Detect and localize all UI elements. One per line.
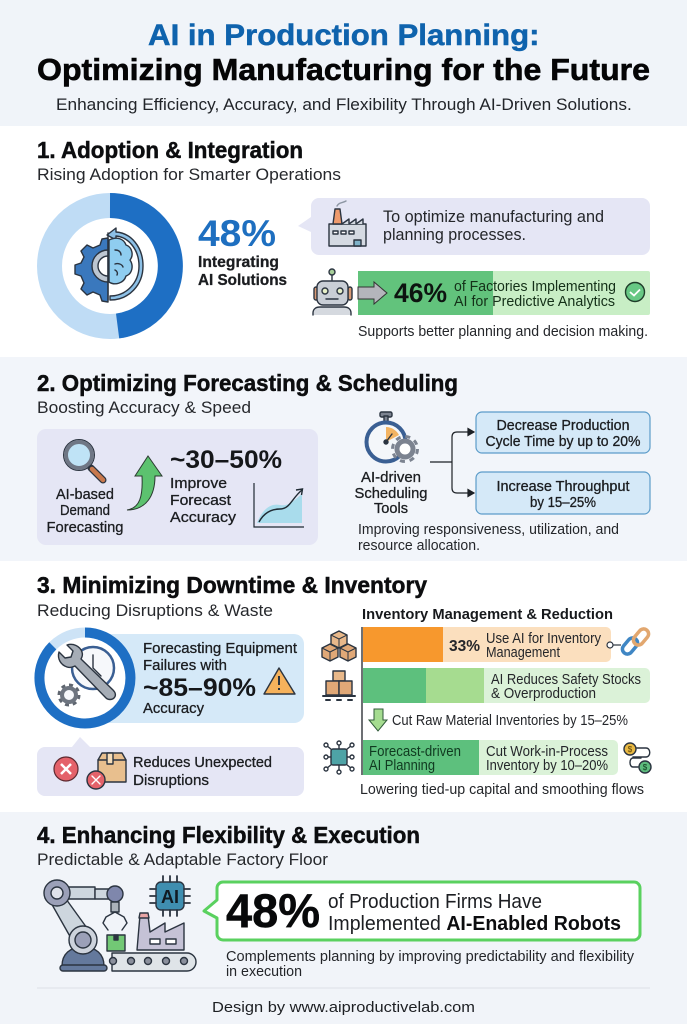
panel: reduces disruptions bbox=[37, 737, 304, 796]
icon: arrow bbox=[358, 282, 387, 304]
note: resource allocation. bbox=[358, 537, 480, 554]
icon: wrench, clock and gear bbox=[58, 644, 115, 705]
footer credit: Design by www.aiproductivelab.com bbox=[212, 999, 475, 1016]
stat 48%: 48% bbox=[198, 213, 276, 254]
panel: equipment failures: Accuracy bbox=[143, 700, 204, 717]
box: cycle time: Decrease Production bbox=[496, 417, 630, 434]
icon: coins: $ bbox=[643, 763, 648, 772]
stat bar: 46%: 46% bbox=[394, 278, 447, 308]
heading: 1. Adoption & Integration bbox=[37, 137, 303, 163]
bar: 33% bbox=[363, 627, 611, 662]
bar: 33%: 33% bbox=[449, 638, 480, 655]
panel: equipment failures: Failures with bbox=[143, 657, 227, 674]
panel: equipment failures bbox=[35, 628, 304, 728]
title line 2: Optimizing Manufacturing for the Future bbox=[37, 52, 650, 87]
callout: optimize: planning processes. bbox=[383, 226, 526, 244]
box: throughput bbox=[476, 472, 650, 514]
callout: 48% robots: 48% bbox=[226, 884, 320, 937]
note bbox=[226, 948, 634, 980]
heading: 3. Minimizing Downtime & Inventory bbox=[37, 572, 427, 598]
stat bar: 46%: AI for Predictive Analytics bbox=[454, 293, 615, 310]
icon: check bbox=[626, 282, 644, 302]
callout: optimize bbox=[298, 198, 650, 255]
label: scheduling tools bbox=[354, 469, 428, 517]
panel: demand forecasting: Forecast bbox=[170, 492, 232, 509]
note: Supports better planning and decision making. bbox=[358, 323, 648, 340]
bar: 33%: Management bbox=[486, 644, 561, 661]
bar: forecast-driven: Inventory by 10–20% bbox=[486, 757, 608, 774]
note: Improving responsiveness, utilization, and bbox=[358, 521, 619, 538]
section 1: adoption and integration: AI Solutions bbox=[198, 272, 287, 289]
icon: robot arm with factory and conveyor: AI bbox=[161, 887, 179, 907]
panel: demand forecasting bbox=[37, 429, 318, 545]
panel: demand forecasting: Forecasting bbox=[46, 519, 124, 536]
section 3: downtime and inventory bbox=[35, 572, 651, 798]
bar: safety stocks: & Overproduction bbox=[491, 685, 596, 702]
panel: demand forecasting: Improve bbox=[170, 475, 227, 492]
bar: forecast-driven: Cut Work-in-Process bbox=[486, 743, 608, 760]
icon: stopwatch and gear bbox=[366, 412, 418, 462]
callout: optimize: To optimize manufacturing and bbox=[383, 208, 604, 226]
bar: 33%: Use AI for Inventory bbox=[486, 630, 601, 647]
icon: pallet bbox=[323, 671, 355, 700]
icon: warning bbox=[264, 668, 295, 694]
callout: 48% robots: Implemented AI-Enabled Robots bbox=[328, 913, 621, 935]
icon: AI chip network bbox=[324, 741, 354, 774]
section 2: forecasting and scheduling bbox=[37, 370, 650, 554]
icon: coins: $ bbox=[628, 745, 633, 754]
bar: safety stocks bbox=[363, 668, 650, 703]
panel: demand forecasting: AI-based bbox=[56, 486, 114, 503]
label: scheduling tools: Scheduling bbox=[354, 485, 428, 502]
bar: forecast-driven: Forecast-driven bbox=[369, 743, 461, 760]
icon: factory bbox=[329, 201, 366, 246]
label: scheduling tools: AI-driven bbox=[361, 469, 421, 486]
donut gauge bbox=[35, 628, 135, 728]
panel: equipment failures: ~85–90% bbox=[143, 674, 256, 702]
icon: up arrow bbox=[127, 456, 162, 510]
callout: 48% robots: of Production Firms Have bbox=[328, 891, 542, 913]
section 1: adoption and integration bbox=[37, 137, 650, 340]
stat bar: 46%: of Factories Implementing bbox=[454, 278, 616, 295]
panel: reduces disruptions: Disruptions bbox=[133, 772, 209, 789]
axis bbox=[361, 627, 363, 775]
panel: equipment failures: Forecasting Equipment bbox=[143, 640, 298, 657]
header bbox=[37, 18, 650, 114]
bar: forecast-driven bbox=[363, 740, 618, 775]
icon: boxes bbox=[322, 631, 356, 661]
heading: 2. Optimizing Forecasting & Scheduling bbox=[37, 370, 458, 396]
box: cycle time bbox=[476, 412, 650, 453]
chart title: Inventory Management & Reduction bbox=[362, 607, 613, 623]
icon: coins bbox=[624, 743, 651, 773]
box: throughput: Increase Throughput bbox=[496, 478, 630, 495]
callout: 48% robots bbox=[204, 882, 640, 940]
subheading: Rising Adoption for Smarter Operations bbox=[37, 165, 341, 184]
bar: forecast-driven: AI Planning bbox=[369, 757, 435, 774]
chart: rising line bbox=[254, 483, 304, 527]
box: throughput: by 15–25% bbox=[530, 494, 596, 511]
panel: reduces disruptions: Reduces Unexpected bbox=[133, 754, 272, 771]
note: Lowering tied-up capital and smoothing flows bbox=[360, 781, 644, 798]
label: raw material: Cut Raw Material Inventories by 15–25% bbox=[392, 712, 628, 729]
subheading: Predictable & Adaptable Factory Floor bbox=[37, 850, 328, 869]
icon: gear and brain bbox=[75, 228, 143, 302]
icon: box with cross bbox=[87, 753, 126, 789]
stat bar: 46% bbox=[358, 271, 650, 315]
icon: robot bbox=[313, 269, 352, 315]
inventory chart bbox=[360, 607, 651, 798]
subheading: Reducing Disruptions & Waste bbox=[37, 601, 273, 620]
panel: demand forecasting: Demand bbox=[60, 502, 110, 519]
label: scheduling tools: Tools bbox=[374, 500, 408, 517]
arrows: branching bbox=[430, 428, 474, 496]
box: cycle time: Cycle Time by up to 20% bbox=[486, 433, 640, 450]
icon: cancel bbox=[54, 757, 78, 781]
icon: chain link bbox=[607, 627, 651, 656]
note: in execution bbox=[226, 963, 302, 980]
donut chart 48% bbox=[50, 206, 170, 326]
subheading: Boosting Accuracy & Speed bbox=[37, 398, 251, 417]
panel: demand forecasting: Accuracy bbox=[170, 509, 237, 526]
icon: magnifier bbox=[64, 440, 103, 480]
section 4: flexibility and execution bbox=[37, 822, 640, 980]
icon: robot arm with factory and conveyor bbox=[44, 876, 196, 971]
bar: safety stocks: AI Reduces Safety Stocks bbox=[491, 671, 641, 688]
stat label: Integrating bbox=[198, 254, 279, 271]
note: Complements planning by improving predictability and flexibility bbox=[226, 948, 634, 965]
icon: down arrow bbox=[369, 709, 387, 731]
stat: 30-50%: ~30–50% bbox=[170, 446, 282, 474]
note bbox=[358, 521, 619, 554]
heading: 4. Enhancing Flexibility & Execution bbox=[37, 822, 420, 848]
